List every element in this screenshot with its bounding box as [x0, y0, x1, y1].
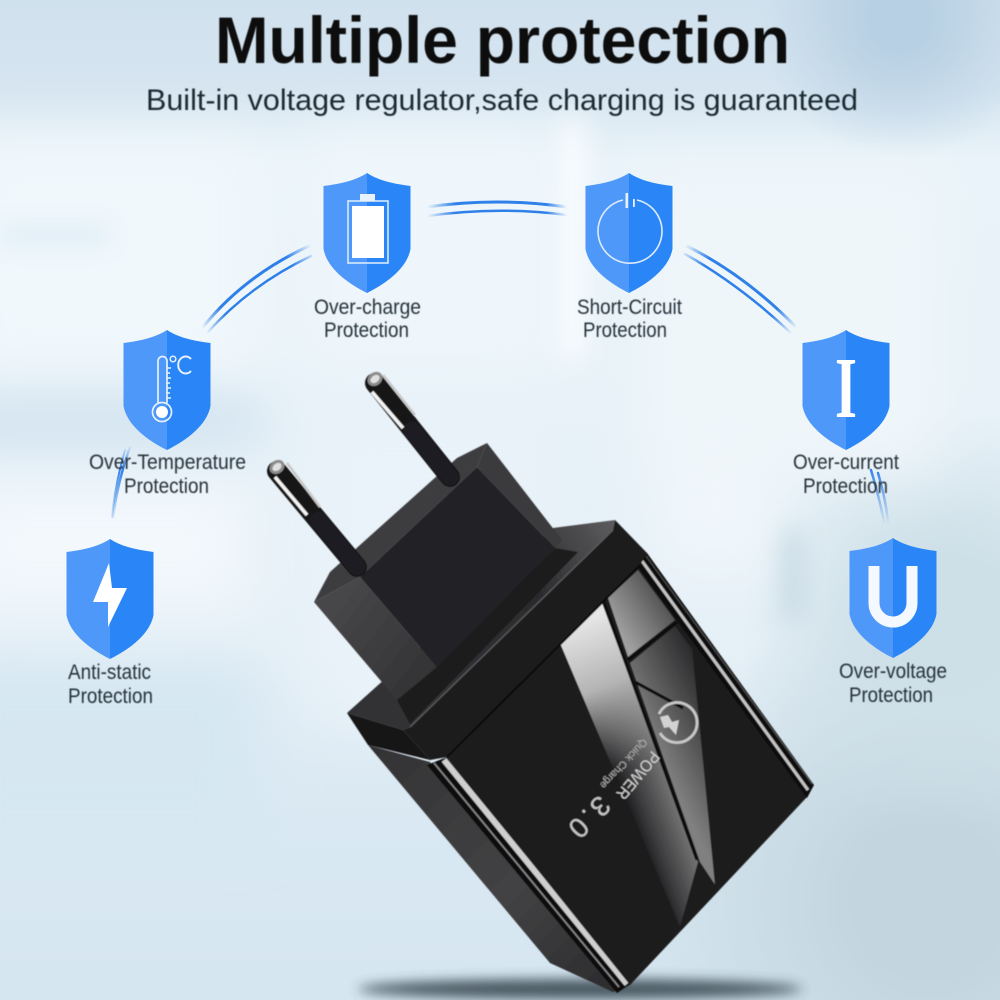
label: anti-static: Anti-static	[68, 661, 151, 684]
icon: letter U shield	[850, 538, 936, 658]
label: over-charge: Protection	[324, 319, 409, 342]
collar band	[403, 520, 647, 760]
collar underside	[347, 713, 430, 760]
collar top face	[347, 520, 615, 730]
glossy panel: upper facet	[608, 570, 675, 657]
label: over-charge: Over-charge	[314, 296, 421, 319]
glossy panel: lower facet	[630, 626, 716, 886]
quick charge text: Quick Charge	[597, 736, 650, 791]
version text: 3.0	[562, 790, 617, 844]
icon: lightning shield	[66, 539, 154, 659]
charger body side face	[368, 745, 630, 992]
label: over-temperature: Protection	[124, 475, 209, 498]
plug head	[314, 443, 578, 724]
icon: letter I shield: I	[835, 340, 857, 436]
label: anti-static: Protection	[68, 685, 153, 708]
label: over-current: Over-current	[793, 451, 899, 474]
panel: over-temperature protection	[89, 330, 246, 498]
product text: POWER	[612, 747, 663, 803]
label: over-voltage: Over-voltage	[839, 660, 947, 683]
subtitle: Built-in voltage regulator,safe charging is guaranteed	[146, 84, 858, 117]
label: over-voltage: Protection	[849, 684, 933, 707]
icon: battery shield	[324, 173, 410, 293]
connector arcs	[112, 202, 888, 527]
pin lower	[267, 457, 357, 567]
icon: thermometer shield	[124, 330, 210, 450]
glossy panel: silver strip	[560, 603, 698, 927]
quick charge circle logo	[659, 703, 697, 743]
chrome edge: left	[427, 757, 632, 993]
label: over-current: Protection	[803, 475, 888, 498]
panel: over-current protection	[793, 330, 899, 498]
panel: short-circuit protection	[577, 173, 682, 342]
label: short-circuit: Protection	[583, 319, 667, 342]
label: over-temperature: Over-Temperature	[89, 451, 246, 474]
panel: over-voltage protection	[839, 538, 947, 707]
title: Multiple protection	[215, 3, 790, 77]
panel: anti-static protection	[66, 539, 154, 708]
facet lines	[603, 600, 716, 888]
floor shadow under charger	[358, 979, 802, 999]
icon: letter I shield	[802, 330, 890, 450]
icon: power shield	[586, 173, 672, 293]
label: short-circuit: Short-Circuit	[577, 296, 682, 319]
charger body front face	[447, 565, 807, 985]
pin upper	[365, 369, 450, 477]
panel: over-charge protection	[314, 173, 421, 342]
charger illustration	[267, 369, 814, 993]
chrome edge: right	[638, 552, 814, 798]
